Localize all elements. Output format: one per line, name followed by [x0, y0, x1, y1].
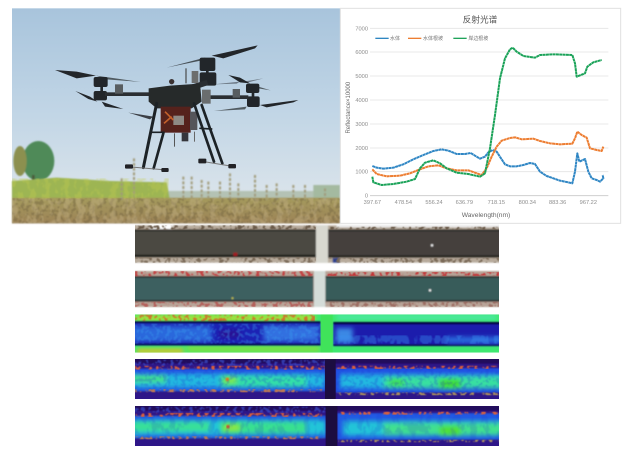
y axis tick labels: 4000: [355, 98, 368, 104]
sky: [12, 8, 340, 223]
y axis tick labels: 2000: [355, 146, 368, 152]
x axis tick labels: 478.54: [395, 200, 412, 206]
curve: water body: [372, 149, 603, 183]
y axis tick labels: [355, 26, 368, 200]
arms: [105, 80, 248, 104]
legend: 岸边根坡: [468, 35, 488, 42]
panel: true colour strip 1: [130, 225, 504, 263]
panel: true colour strip 2: [130, 271, 504, 307]
y axis tick labels: 3000: [355, 122, 368, 128]
y axis tick labels: 6000: [355, 50, 368, 56]
y axis title: Reflectance×10000: [346, 81, 352, 134]
y axis tick labels: 5000: [355, 74, 368, 80]
field: [12, 158, 340, 223]
rotor blades: [55, 45, 298, 119]
legend: 水体根坡: [423, 35, 443, 42]
chart title: 反射光谱: [463, 13, 498, 24]
x axis tick labels: 967.22: [580, 200, 597, 206]
x axis title: Wavelength(nm): [462, 212, 510, 219]
y axis tick labels: 1000: [355, 170, 368, 176]
legend: 水体: [390, 35, 400, 42]
x axis tick labels: 636.79: [456, 200, 473, 206]
payload: [161, 107, 191, 133]
x axis tick labels: 397.67: [364, 200, 381, 206]
body: [149, 84, 202, 108]
legend: [375, 35, 488, 42]
x axis tick labels: 718.15: [488, 200, 505, 206]
y axis tick labels: 7000: [355, 26, 368, 32]
panel: index map strip 4: [135, 359, 499, 399]
panel: index map strip 5: [135, 406, 499, 446]
landing gear: [127, 103, 233, 170]
drone: [55, 45, 298, 172]
panel: reflectance spectrum chart: [340, 8, 621, 223]
tree: [13, 141, 54, 182]
x axis tick labels: 556.24: [425, 200, 443, 206]
x axis tick labels: 800.34: [519, 200, 536, 206]
motors: [94, 58, 260, 107]
panel: drone photo: [12, 8, 340, 223]
curve: water embankment: [372, 132, 603, 176]
panel: index map strip 3: [130, 314, 504, 353]
y axis tick labels: 0: [365, 194, 368, 200]
x axis tick labels: [364, 200, 597, 206]
x axis tick labels: 883.36: [549, 200, 566, 206]
curve: bank embankment: [372, 48, 602, 185]
